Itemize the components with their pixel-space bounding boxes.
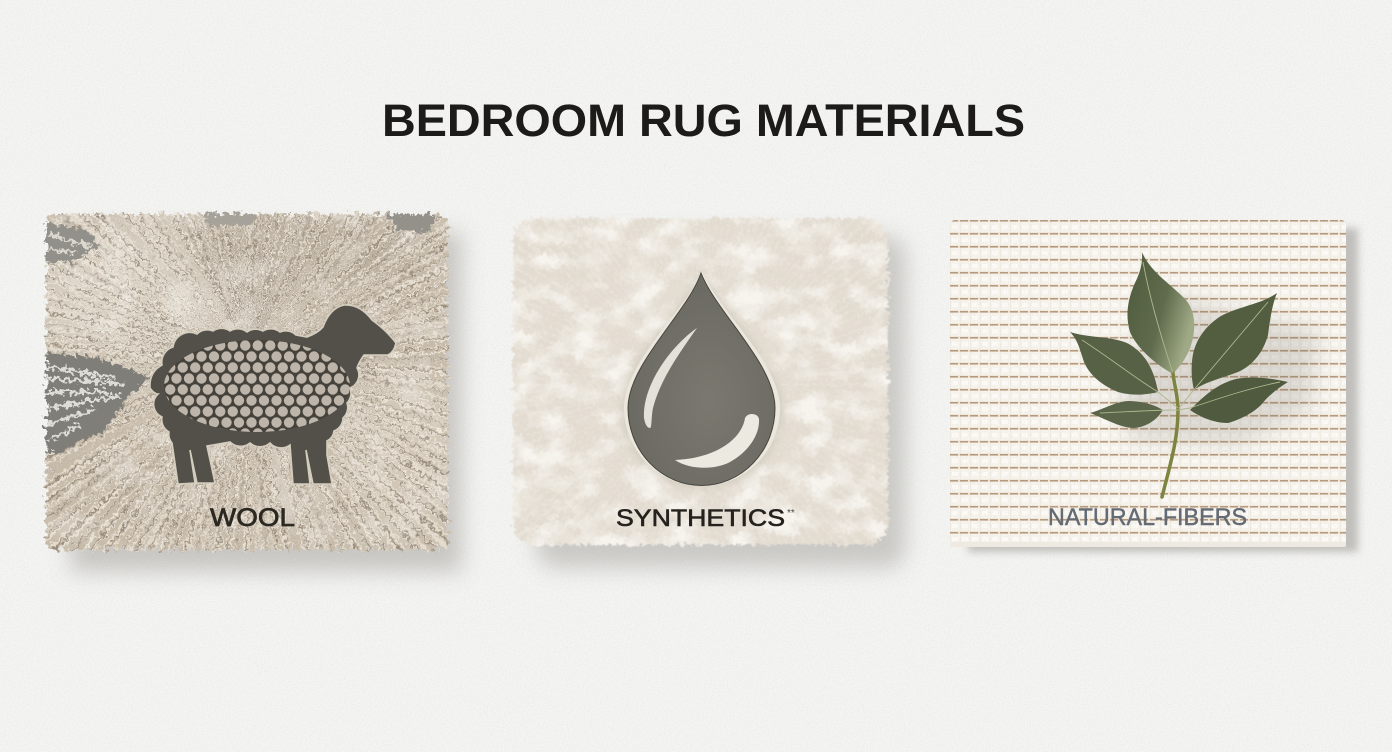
panel: synthetics [513,218,906,568]
title: BEDROOM RUG MATERIALS [382,95,1025,146]
icon: sheep [150,305,396,484]
shaggy wool rug [30,208,470,550]
label mark: ** [787,508,795,519]
right upper leaf [1192,293,1277,390]
lower left leaf [1090,401,1163,428]
leaf shadow [1120,290,1320,445]
rug shadow [968,228,1358,552]
icon: leaf sprig [1070,252,1320,497]
drop highlight bottom [675,414,759,468]
left leaf [1070,332,1158,395]
sheep silhouette [150,305,396,484]
gray streak patches [42,208,438,452]
plush synthetic rug [513,218,888,545]
rug shadow [70,232,462,572]
rug shadow [536,236,906,568]
woven natural-fiber rug [950,220,1346,547]
label: natural fibers: NATURAL-FIBERS [1048,504,1247,531]
fleece pattern [164,340,350,432]
drop highlight left [644,328,697,428]
icon: water drop [620,268,784,490]
lower right leaf [1190,378,1288,423]
stem and veins [1162,373,1178,497]
label: wool: WOOL [210,504,295,532]
label: synthetics: SYNTHETICS [616,505,785,532]
panel: wool [30,208,470,572]
top leaf [1127,252,1194,374]
panel: natural fibers [950,220,1358,552]
